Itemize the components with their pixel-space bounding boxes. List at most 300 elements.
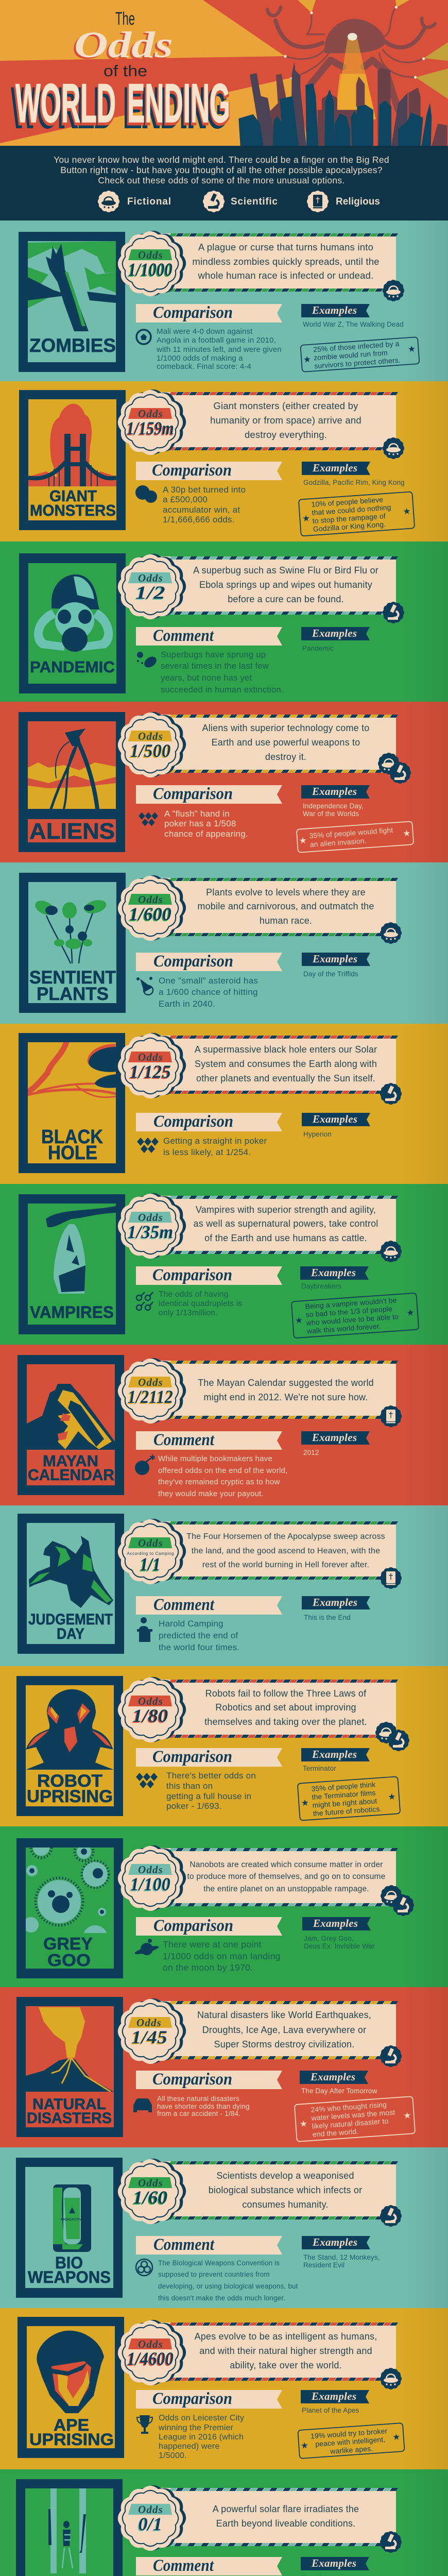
panel: vampires (0, 1184, 448, 1345)
examples: Examples (312, 953, 357, 965)
examples: War of the Worlds (303, 810, 359, 818)
odds ticket (118, 1033, 397, 1098)
examples: Examples (311, 2390, 356, 2402)
examples: Godzilla, Pacific Rim, King Kong (303, 479, 405, 486)
odds ticket: destroy everything. (245, 429, 327, 440)
comparison: on the moon by 1970. (163, 1962, 253, 1973)
comparison (134, 1917, 282, 1973)
examples: Hyperion (303, 1130, 332, 1138)
comment (136, 626, 284, 694)
poster: zombies (19, 232, 125, 372)
odds ticket: mindless zombies quickly spreads, until the (192, 256, 380, 267)
intro text: You never know how the world might end. There could be a finger on the Big Red (54, 155, 389, 165)
poster: sentient plants: PLANTS (37, 984, 109, 1004)
examples: Resident Evil (303, 2261, 344, 2269)
comparison: a 1/600 chance of hitting (159, 987, 258, 997)
stamp callout: likely natural disaster to (312, 2116, 389, 2130)
comparison: 1/5000. (159, 2451, 187, 2460)
comment: Comment (153, 2556, 214, 2575)
infographic: ENDING (126, 74, 230, 135)
odds ticket (118, 554, 397, 619)
comparison: from a car accident - 1/84. (157, 2110, 240, 2117)
examples: Examples (312, 1113, 357, 1125)
odds ticket (118, 1677, 397, 1742)
examples: Daybreakers (301, 1282, 341, 1290)
stamp callout: ★ (303, 354, 312, 365)
comment: Comment (153, 1431, 215, 1449)
examples: Examples (311, 1266, 356, 1279)
odds ticket: Odds (138, 408, 163, 420)
comparison: Angola in a football game in 2010, (157, 336, 276, 345)
title: Odds (74, 24, 173, 65)
comment: this doesn't make the odds much longer. (158, 2294, 285, 2302)
odds ticket: the entire planet on an unstoppable rampage. (203, 1885, 369, 1893)
comparison: a £500,000 (163, 495, 208, 504)
alien invader (238, 6, 447, 146)
stamp callout (300, 337, 420, 372)
panel: natural disasters (0, 1987, 448, 2147)
stamp callout (291, 1293, 419, 1338)
odds ticket: Ebola springs up and wipes out humanity (199, 580, 372, 590)
stamp callout (295, 2096, 415, 2142)
poster: zombies: ZOMBIES (29, 335, 116, 356)
poster: giant monsters: GIANT (49, 487, 97, 505)
stamp callout: ★ (406, 1308, 415, 1318)
examples (302, 953, 370, 978)
odds ticket: 1/80 (133, 1705, 168, 1726)
stamp callout: ★ (299, 836, 307, 846)
poster: bio weapons: WEAPONS (28, 2268, 111, 2286)
stamp callout: so bad to the 1/3 of people (305, 1304, 392, 1319)
odds ticket: 1/4600 (127, 2348, 174, 2369)
examples: Examples (311, 2557, 356, 2569)
comparison: Getting a straight in poker (163, 1136, 267, 1146)
odds ticket: the land, and the good ascend to Heaven, with the (192, 1547, 380, 1555)
panel: bio weapons (0, 2147, 448, 2308)
stamp callout: 35% of people would fight (309, 826, 393, 840)
comparison: winning the Premier (158, 2424, 234, 2432)
comparison: Mali were 4-0 down against (157, 327, 253, 336)
poster: bio weapons: RADIOACTIVE (61, 2218, 84, 2222)
comment (133, 2556, 282, 2576)
poster: judgement day (18, 1514, 124, 1654)
comparison (136, 1112, 282, 1157)
comparison: this than on (166, 1781, 213, 1791)
comment: Comment (153, 626, 214, 645)
odds ticket (118, 875, 397, 941)
odds ticket: The Four Horsemen of the Apocalypse sweep across (186, 1532, 385, 1541)
comment: ✱ (149, 1453, 156, 1462)
odds ticket: mobile and carnivorous, and outmatch the (197, 901, 374, 911)
icon: scientific (380, 2531, 402, 2553)
examples: World War Z, The Walking Dead (303, 320, 404, 328)
comment: years, but none has yet (161, 673, 252, 683)
odds ticket (118, 712, 397, 777)
odds ticket (118, 1358, 397, 1423)
comparison: Comparison (152, 1748, 232, 1766)
intro text (54, 155, 389, 185)
odds ticket: Robots fail to follow the Three Laws of (205, 1688, 367, 1699)
odds ticket: Earth and use powerful weapons to (212, 737, 360, 748)
odds ticket: Odds (138, 1051, 163, 1063)
odds ticket: System and consumes the Earth along with (195, 1059, 377, 1069)
panel: aliens (0, 702, 448, 862)
comment: Harold Camping (159, 1619, 223, 1629)
odds ticket: Odds (138, 2177, 163, 2189)
poster: mayan calendar: CALENDAR (28, 1466, 114, 1484)
stamp callout: ★ (302, 513, 311, 523)
comment: succeeded in human extinction. (161, 685, 284, 694)
examples: Jam, Grey Goo, (304, 1935, 354, 1942)
comparison: getting a full house in (166, 1791, 251, 1801)
stamp callout: Godzilla or King Kong. (313, 520, 386, 533)
comparison (136, 785, 282, 839)
odds ticket: Odds (138, 893, 163, 906)
title: Odds (72, 26, 171, 67)
odds ticket (118, 1519, 397, 1584)
stamp callout: ★ (403, 2110, 411, 2121)
comparison: One "small" asteroid has (159, 976, 258, 986)
poster: ape uprising: APE (54, 2416, 89, 2434)
comment: The Biological Weapons Convention is (158, 2259, 280, 2267)
odds ticket: Odds (138, 572, 163, 584)
odds ticket (118, 1998, 397, 2064)
stamp callout: warlike apes. (330, 2444, 373, 2455)
examples: Examples (312, 627, 357, 639)
poster: grey goo: GOO (47, 1951, 91, 1970)
odds ticket: 1/2112 (127, 1387, 172, 1408)
odds ticket: The Mayan Calendar suggested the world (198, 1378, 374, 1388)
examples (302, 1113, 370, 1138)
odds ticket: 1/600 (128, 905, 170, 925)
comparison: The odds of having (159, 1290, 228, 1299)
examples: This is the End (304, 1614, 351, 1621)
poster: robot uprising (16, 1676, 123, 1816)
comparison: poker - 1/693. (166, 1801, 222, 1811)
odds ticket: to produce more of themselves, and go on to consume (187, 1872, 386, 1881)
comment (136, 1596, 282, 1652)
comparison: Comparison (152, 2389, 232, 2408)
comment (136, 2235, 298, 2302)
odds ticket: might end in 2012. We're not sure how. (204, 1392, 368, 1402)
icon: scientific (380, 1083, 402, 1105)
odds ticket: 1/35m (128, 1222, 173, 1242)
comparison: poker has a 1/508 (164, 819, 236, 828)
odds ticket: consumes humanity. (242, 2199, 329, 2210)
comment: developing, or using biological weapons, but (158, 2282, 298, 2290)
odds ticket: 1/1000 (127, 260, 171, 281)
stamp callout: ★ (403, 828, 411, 838)
comment: offered odds on the end of the world, (158, 1466, 287, 1475)
poster: black hole: BLACK (41, 1126, 104, 1148)
odds ticket: as well as supernatural powers, take control (194, 1218, 378, 1229)
icon: fictional (380, 922, 402, 944)
examples: Examples (313, 1917, 358, 1929)
icon: fictional (380, 1241, 402, 1262)
examples (300, 1266, 369, 1290)
stamp callout: ★ (301, 1798, 309, 1808)
comparison: League in 2016 (which (159, 2433, 244, 2442)
stamp callout: ★ (300, 2441, 309, 2451)
stamp callout: ★ (295, 1315, 303, 1326)
icon: fictional (383, 437, 404, 459)
odds ticket: Odds (136, 2016, 161, 2029)
odds ticket: A supermassive black hole enters our Solar (195, 1044, 377, 1055)
comparison: happened) were (159, 2442, 219, 2451)
comment: Comment (153, 1596, 215, 1614)
comparison: is less likely, at 1/254. (163, 1147, 251, 1157)
odds ticket: humanity or from space) arrive and (210, 415, 361, 426)
legend: Scientific (231, 196, 278, 207)
icon: religious (380, 1567, 402, 1589)
odds ticket: A powerful solar flare irradiates the (213, 2504, 359, 2514)
odds ticket: 0/1 (137, 2515, 162, 2535)
comparison: A 30p bet turned into (163, 485, 246, 495)
poster: giant monsters (19, 390, 126, 530)
skyline (269, 68, 447, 146)
odds ticket: 0/1 (138, 2514, 163, 2534)
odds ticket: of the Earth and use humans as cattle. (204, 1233, 367, 1243)
poster: robot uprising: ROBOT (37, 1771, 102, 1791)
odds ticket: biological substance which infects or (209, 2185, 362, 2195)
stamp callout: ★ (392, 2432, 401, 2442)
panel: zombies (0, 221, 448, 381)
comparison: only 1/13million. (159, 1309, 218, 1317)
poster: ape uprising: UPRISING (29, 2430, 114, 2449)
odds ticket: Earth beyond liveable conditions. (216, 2518, 355, 2529)
infographic: ENDING (124, 77, 228, 139)
stamp callout: peace with intelligent, (315, 2435, 386, 2448)
odds ticket: Odds (138, 730, 163, 742)
examples: Day of the Triffids (303, 970, 358, 978)
comparison: Comparison (152, 461, 232, 480)
poster: judgement day: DAY (57, 1625, 84, 1642)
stamp callout: zombie would run from (314, 348, 388, 362)
odds ticket (118, 231, 397, 296)
examples: 2012 (303, 1449, 319, 1456)
poster: natural disasters (16, 1997, 123, 2137)
comment: While multiple bookmakers have (158, 1454, 272, 1463)
comment: they would make your payout. (158, 1489, 264, 1498)
comparison: 1/1000 odds on man landing (163, 1951, 281, 1961)
odds ticket (118, 2159, 397, 2224)
poster: ape uprising (18, 2317, 124, 2458)
icon: fictional (380, 2368, 402, 2389)
odds ticket: Super Storms destroy civilization. (214, 2039, 354, 2049)
poster: natural disasters: DISASTERS (27, 2110, 112, 2127)
odds ticket (118, 2485, 397, 2551)
examples: Examples (312, 2236, 357, 2248)
examples (302, 2236, 380, 2269)
comment (135, 1431, 287, 1498)
examples: Examples (312, 785, 357, 798)
odds ticket: 1/100 (129, 1875, 169, 1895)
infographic: ENDING (127, 72, 230, 134)
odds ticket: before a cure can be found. (228, 594, 344, 604)
title: WORLD (14, 74, 116, 135)
odds ticket: themselves and taking over the planet. (204, 1717, 367, 1727)
examples: Examples (310, 2071, 355, 2083)
examples: The Day After Tomorrow (301, 2087, 377, 2095)
comparison: Earth in 2040. (159, 999, 215, 1009)
icon: fictional (383, 280, 404, 301)
odds ticket: Vampires with superior strength and agility, (196, 1205, 376, 1215)
stamp callout: 19% would try to broker (311, 2427, 388, 2440)
title: WORLD (12, 77, 113, 139)
odds ticket: 1/159m (127, 418, 174, 438)
odds ticket (118, 1845, 397, 1911)
title: of the (104, 62, 147, 80)
examples (301, 2390, 369, 2414)
comment: several times in the last few (161, 662, 269, 671)
odds ticket: Odds (138, 249, 163, 261)
poster: sentient plants (19, 873, 126, 1013)
icon: scientific (380, 2205, 402, 2227)
stamp callout: the future of robotics. (313, 1805, 382, 1818)
stamp callout: 35% of people think (311, 1780, 376, 1793)
odds ticket (118, 2320, 397, 2385)
stamp callout: who would love to be able to (305, 1312, 399, 1327)
comparison: All these natural disasters (157, 2095, 239, 2103)
stamp callout: water levels was the most (311, 2108, 395, 2122)
comparison: Comparison (153, 785, 233, 803)
odds ticket: 1/100 (130, 1874, 170, 1894)
examples: Terminator (303, 1765, 336, 1772)
stamp callout: 25% of those infected by a (313, 340, 400, 353)
comparison: comeback. Final score: 4-4 (157, 362, 251, 371)
stamp callout: ★ (403, 506, 411, 517)
odds ticket: 1/60 (132, 2188, 167, 2209)
poster: aliens (19, 712, 125, 852)
odds ticket: 1/45 (131, 2027, 167, 2047)
examples: Examples (312, 1596, 357, 1608)
panel: robot uprising (0, 1666, 448, 1826)
comparison: Comparison (153, 1917, 233, 1935)
stamp callout (297, 821, 413, 853)
poster: aliens: ALIENS (29, 819, 115, 844)
comparison (133, 2070, 282, 2117)
stamp callout: the Terminator films (312, 1788, 376, 1801)
poster: grey goo: GREY (43, 1934, 93, 1953)
comparison (136, 952, 282, 1009)
comparison: 1/1,666,666 odds. (163, 515, 235, 524)
comparison: A "flush" hand in (164, 809, 230, 819)
icon: scientific (383, 602, 404, 623)
examples (300, 2071, 377, 2095)
odds ticket: Natural disasters like World Earthquakes, (197, 2010, 371, 2020)
odds ticket: Nanobots are created which consume matter in order (189, 1860, 383, 1869)
comment: Superbugs have sprung up (161, 650, 266, 659)
panel: sentient plants (0, 862, 448, 1024)
odds ticket: 1/2 (135, 582, 165, 603)
title: The (115, 9, 135, 29)
icon: religious (380, 1405, 402, 1427)
odds ticket: 1/2 (134, 583, 164, 604)
examples: Examples (312, 462, 357, 474)
poster: grey goo (16, 1837, 123, 1978)
examples: Independence Day, (303, 802, 364, 810)
icon: scientific (380, 2045, 402, 2067)
odds ticket: 1/35m (127, 1223, 172, 1243)
odds ticket: Aliens with superior technology come to (202, 723, 369, 733)
poster: pandemic: PANDEMIC (30, 658, 115, 676)
odds ticket: and with their natural higher strength and (199, 2346, 372, 2356)
odds ticket: Robotics and set about improving (215, 1702, 356, 1713)
comment: Comment (153, 2235, 215, 2254)
stamp callout: walk this world forever. (306, 1322, 381, 1335)
examples (302, 1596, 370, 1621)
odds ticket: 1/1 (140, 1554, 161, 1574)
legend (98, 191, 380, 212)
icons: fictional and scientific (378, 753, 411, 784)
comment: supposed to prevent countries from (158, 2270, 270, 2278)
stamp callout: ★ (388, 1792, 396, 1802)
odds ticket: 1/159m (126, 419, 173, 439)
comparison: 1/1000 odds of making a (157, 354, 243, 363)
panel: intro and legend (0, 146, 448, 221)
odds ticket: 1/80 (132, 1706, 167, 1727)
comparison: There's better odds on (166, 1771, 256, 1781)
stamp callout: an alien invasion. (309, 836, 367, 849)
stamp callout: 24% who thought rising (311, 2100, 387, 2114)
title (12, 9, 230, 139)
comparison (135, 461, 282, 524)
odds ticket: Odds (138, 1863, 163, 1876)
odds ticket: Giant monsters (either created by (213, 400, 358, 411)
odds ticket: Plants evolve to levels where they are (206, 887, 366, 897)
legend: Fictional (127, 196, 171, 207)
icons: fictional and scientific (375, 1722, 409, 1751)
odds ticket: 1/2112 (128, 1386, 173, 1407)
odds ticket: Odds (138, 1537, 163, 1549)
comparison: Comparison (153, 303, 233, 322)
odds ticket: 1/1 (139, 1555, 160, 1575)
stamp callout: survivors to protect others. (314, 356, 401, 370)
odds ticket: A superbug such as Swine Flu or Bird Flu or (193, 565, 378, 575)
odds ticket: Odds (138, 1211, 163, 1224)
odds ticket: 1/4600 (126, 2349, 173, 2370)
examples: The Stand, 12 Monkeys, (303, 2253, 380, 2261)
comparison: with 11 minutes left, and were given (156, 345, 282, 354)
odds ticket: whole human race is infected or undead. (197, 270, 374, 281)
comparison: accumulator win, at (163, 505, 240, 515)
panel: solar flare (0, 2469, 448, 2576)
stamp callout: to stop the rampage of (312, 512, 386, 525)
examples: Examples (312, 1431, 357, 1444)
poster: sentient plants: SENTIENT (29, 968, 116, 988)
stamp callout: Being a vampire wouldn't be (305, 1296, 397, 1311)
legend: Religious (336, 196, 380, 207)
odds ticket: 1/45 (130, 2028, 166, 2048)
title: WORLD (15, 72, 116, 134)
examples (302, 462, 405, 486)
comment: predicted the end of (159, 1631, 238, 1640)
panel: ape uprising (0, 2308, 448, 2469)
poster: vampires: VAMPIRES (30, 1303, 114, 1321)
odds ticket: 1/60 (133, 2187, 168, 2208)
comment: the world four times. (159, 1642, 239, 1652)
examples (301, 785, 370, 818)
odds ticket: 1/125 (130, 1061, 171, 1082)
odds ticket: According to Camping (127, 1551, 174, 1556)
odds ticket: 1/500 (130, 740, 171, 761)
stamp callout: 10% of people believe (311, 495, 384, 509)
odds ticket: A plague or curse that turns humans into (198, 242, 373, 252)
panel: black hole (0, 1024, 448, 1184)
comparison: identical quadruplets is (159, 1299, 243, 1308)
comparison: Odds on Leicester City (159, 2414, 244, 2422)
poster: vampires (19, 1194, 125, 1334)
